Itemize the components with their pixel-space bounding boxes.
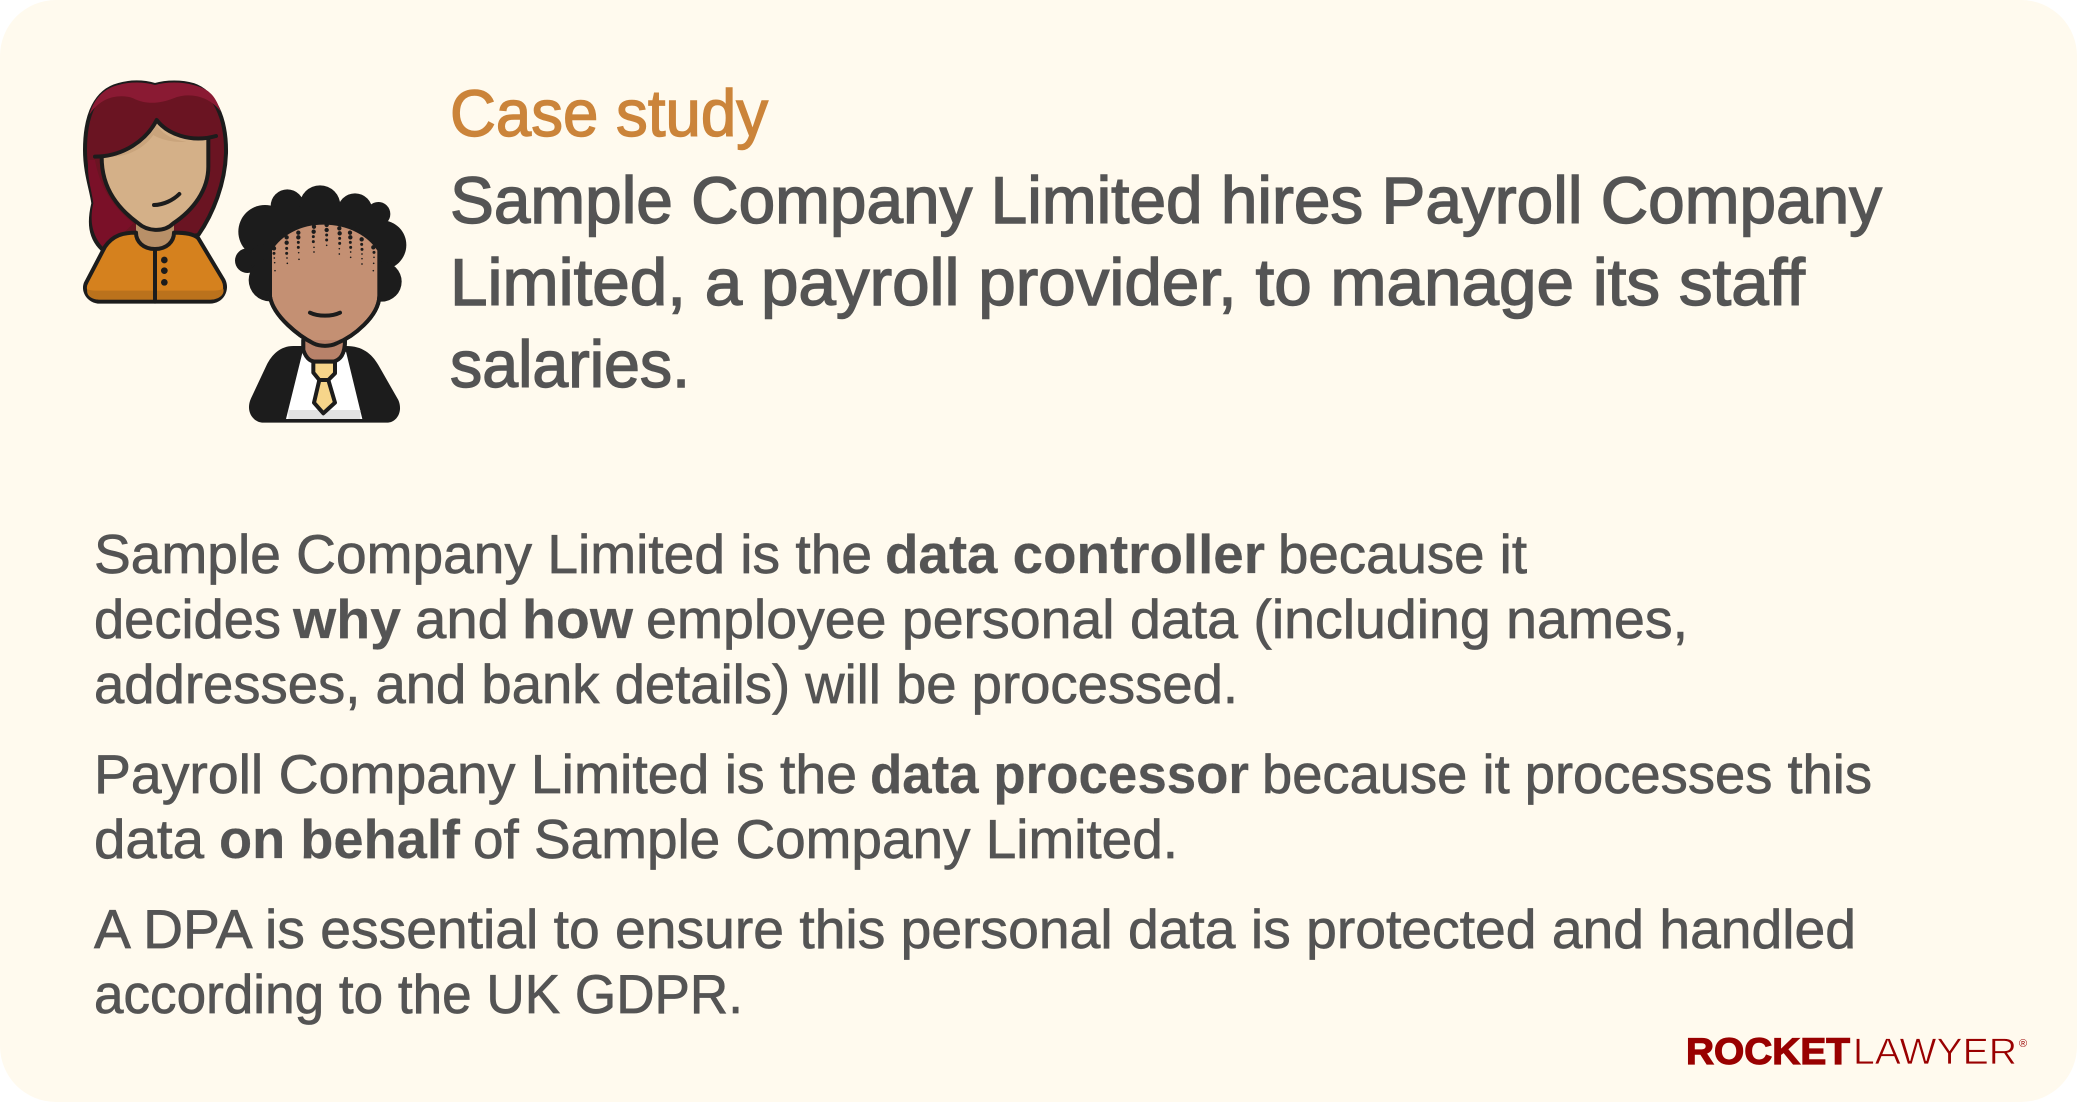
text block: DPA importance: according to the UK GDPR. [94,963,743,1025]
text block: data controller explanation: how [522,588,633,650]
logo: Rocket Lawyer: ® [2019,1038,2027,1050]
text block: data controller explanation [94,523,1688,715]
heading: case study title: Sample Company Limited hires Payroll Company [450,163,1882,237]
text block: DPA importance: A DPA is essential to ensure this personal data is protected and handled [94,898,1856,960]
text block: data processor explanation: data processor [870,743,1249,805]
heading: case study title: Limited, a payroll provider, to manage its staff [450,245,1806,319]
logo: Rocket Lawyer: LAWYER [1853,1031,2017,1072]
text block: data processor explanation: on behalf [219,808,461,870]
logo: Rocket Lawyer [1686,1031,2027,1072]
logo: Rocket Lawyer: ROCKET [1686,1031,1850,1072]
text block: data controller explanation: Sample Company Limited is the [94,523,872,585]
text block: data controller explanation: addresses, and bank details) will be processed. [94,653,1238,715]
heading: case study label: Case study [450,76,768,150]
text block: data processor explanation: data [94,808,204,870]
text block: data processor explanation [94,743,1872,870]
icon: man with curly hair and tie [235,185,406,423]
text block: data controller explanation: employee personal data (including names, [646,588,1688,650]
text block: data processor explanation: of Sample Company Limited. [473,808,1178,870]
heading: case study title: salaries. [450,327,690,401]
text block: data processor explanation: because it processes this [1262,743,1872,805]
text block: data controller explanation: because it [1278,523,1527,585]
text block: data controller explanation: decides [94,588,281,650]
heading: case study title [450,163,1882,401]
text block: data controller explanation: data controller [885,523,1265,585]
text block: data controller explanation: and [415,588,509,650]
icon: woman with red hair [85,82,226,302]
text block: data controller explanation: why [292,588,401,650]
text block: data processor explanation: Payroll Company Limited is the [94,743,857,805]
text block: DPA importance [94,898,1856,1025]
